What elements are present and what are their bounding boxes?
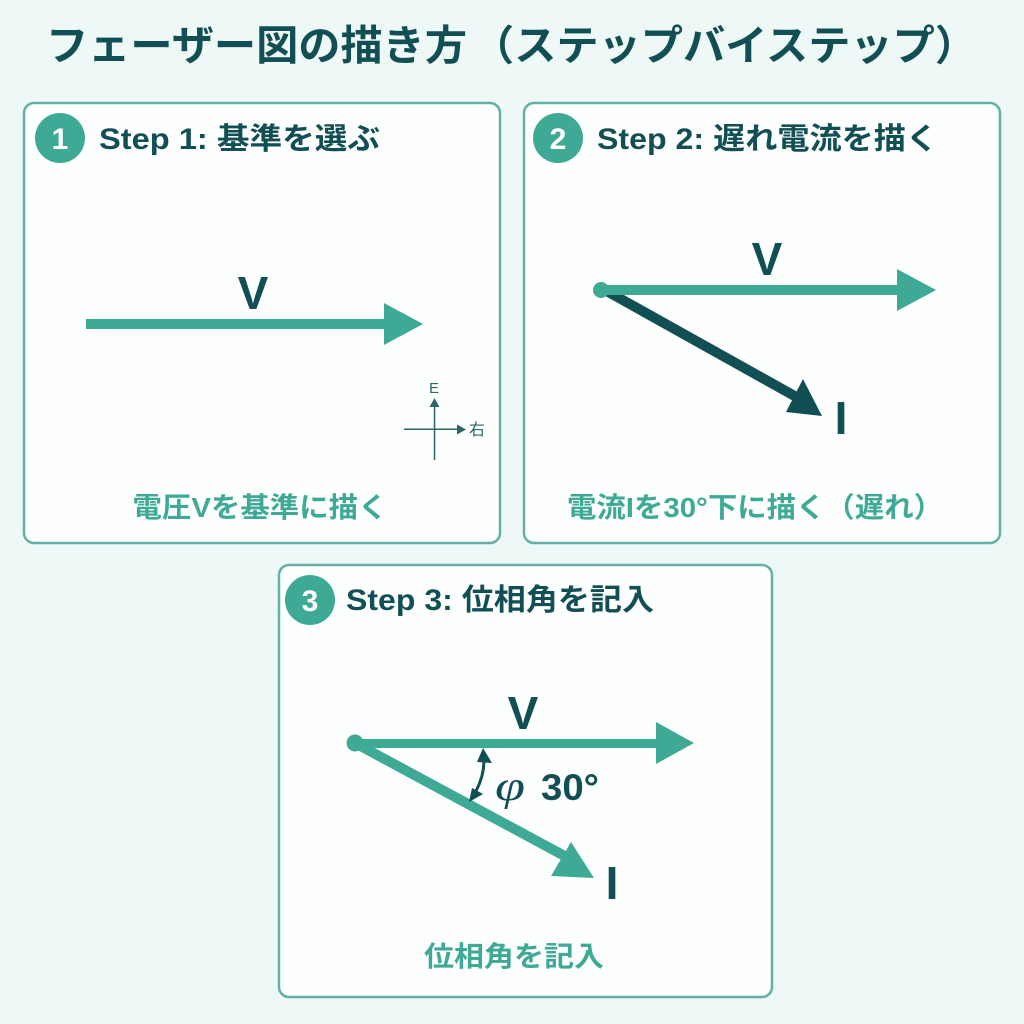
step 2 number badge: 2 [550, 123, 566, 156]
arrow: current I [603, 289, 822, 416]
I label: I [606, 857, 618, 909]
step 1 number badge: 1 [52, 123, 68, 156]
panel: step 3 [279, 565, 772, 997]
phase angle label: 30° [541, 767, 599, 808]
step 2 number badge [533, 113, 583, 163]
icon: orientation axes [404, 380, 485, 460]
panel: step 1 [24, 103, 500, 543]
icon: orientation axes: E [429, 380, 439, 397]
panel: step 2 [524, 103, 1000, 543]
step 2 caption: 電流Iを30°下に描く（遅れ） [567, 492, 943, 523]
title: （ステップバイステップ） [472, 22, 977, 69]
V label: V [508, 687, 539, 739]
arrow: phase angle arc [469, 748, 492, 802]
step 2 heading: Step 2: 遅れ電流を描く [597, 123, 938, 156]
step 3 number badge [285, 575, 335, 625]
step 3 caption: 位相角を記入 [424, 941, 604, 972]
arrow: current I [353, 739, 594, 878]
step 3 heading: Step 3: 位相角を記入 [346, 584, 654, 617]
phase angle label [495, 764, 599, 810]
arrow: voltage V [593, 269, 936, 311]
arrow: voltage V [86, 303, 423, 345]
step 1 heading: Step 1: 基準を選ぶ [99, 123, 380, 156]
V label: V [752, 233, 783, 285]
V label: V [238, 267, 269, 319]
step 1 number badge [35, 113, 85, 163]
I label: I [835, 392, 847, 444]
step 3 number badge: 3 [302, 585, 318, 618]
phase angle label: φ [495, 764, 525, 810]
icon: orientation axes: 右 [469, 421, 485, 439]
arrow: voltage V [346, 722, 694, 764]
title: フェーザー図の描き方 [46, 22, 467, 69]
step 1 caption: 電圧Vを基準に描く [132, 492, 388, 523]
